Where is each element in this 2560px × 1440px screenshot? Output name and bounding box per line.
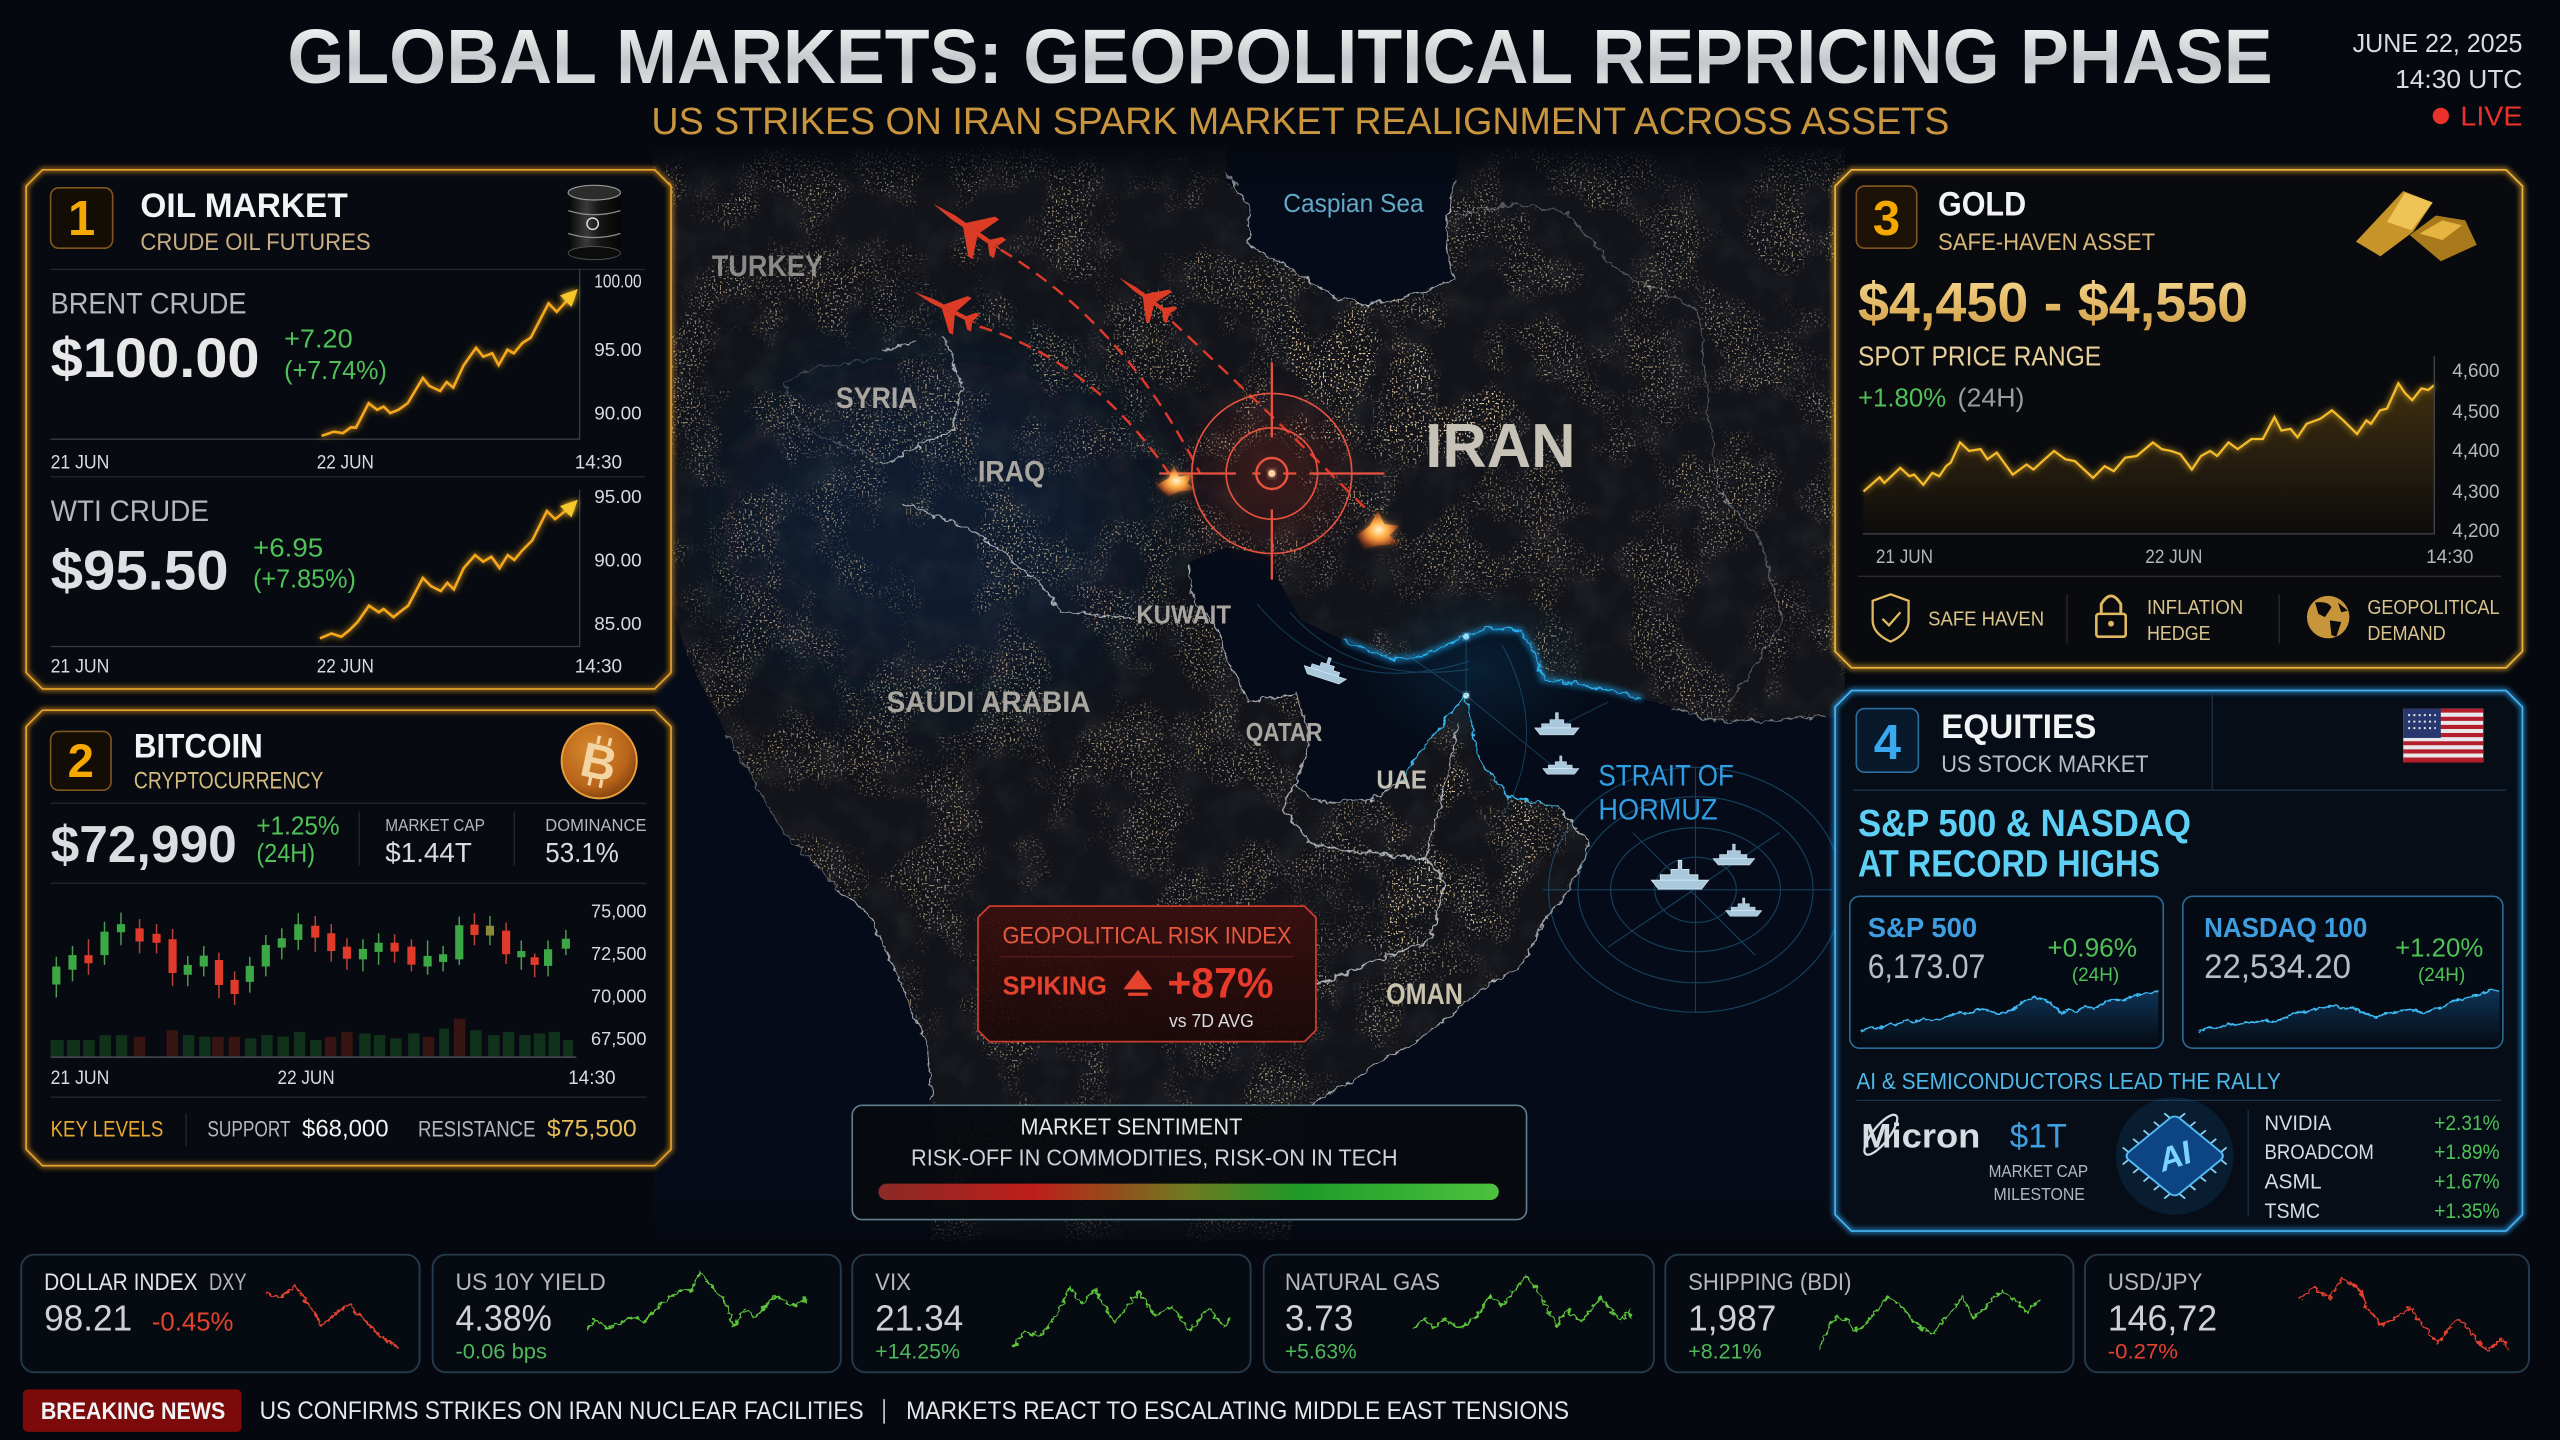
chart: bitcoin candlesticks: 22 JUN [278, 1067, 335, 1089]
map labels: IRAQ [978, 456, 1045, 489]
ticker: shipping BDI: SHIPPING (BDI) [1688, 1270, 1851, 1296]
bitcoin price stats: 53.1% [545, 837, 619, 868]
icon: AI chip: AI [2152, 1133, 2197, 1179]
Micron milestone: $1T [2010, 1118, 2067, 1156]
semiconductor leaders list: TSMC [2264, 1200, 2320, 1223]
inflation hedge tag: HEDGE [2147, 623, 2211, 645]
chart: bitcoin candlesticks: 21 JUN [51, 1067, 109, 1089]
map labels: Caspian Sea [1283, 188, 1424, 218]
callout: geopolitical risk index [978, 906, 1316, 1042]
Micron milestone [1859, 1110, 2088, 1204]
ticker: VIX: 21.34 [875, 1298, 963, 1339]
timestamp and live indicator [2353, 28, 2522, 132]
dividers [51, 269, 645, 477]
key levels row: $75,500 [547, 1115, 637, 1142]
ticker: US 10Y yield: -0.06 bps [456, 1340, 547, 1363]
key levels row [51, 1115, 637, 1142]
callout: geopolitical risk index: +87% [1167, 960, 1273, 1007]
map labels: OMAN [1386, 978, 1463, 1011]
Micron milestone: MARKET CAP [1989, 1161, 2088, 1181]
icon: bitcoin coin [562, 723, 637, 798]
map edge fades [653, 144, 1845, 1249]
heading: oil market: CRUDE OIL FUTURES [140, 229, 371, 256]
panel: equities [1835, 691, 2522, 1231]
breaking news bar: US CONFIRMS STRIKES ON IRAN NUCLEAR FACILITIES [260, 1397, 864, 1425]
badge 4: 4 [1874, 716, 1901, 770]
icon: AI chip [2112, 1097, 2237, 1215]
heading: bitcoin: CRYPTOCURRENCY [134, 768, 323, 795]
equities headline [1858, 802, 2191, 885]
map labels: UAE [1376, 765, 1427, 795]
ticker: USD/JPY: 146,72 [2108, 1298, 2217, 1339]
WTI crude block [51, 495, 356, 601]
timestamp and live indicator: LIVE [2460, 101, 2522, 132]
gold price range: $4,450 - $4,550 [1858, 272, 2248, 334]
sentiment bar [878, 1184, 1499, 1200]
gold price range: +1.80% [1858, 383, 1946, 413]
semiconductor leaders list: BROADCOM [2264, 1141, 2374, 1164]
ticker: USD/JPY: -0.27% [2108, 1340, 2178, 1363]
WTI crude block: WTI CRUDE [51, 495, 209, 528]
chart: Brent line: 100.00 [594, 270, 642, 291]
Brent crude block [51, 287, 387, 389]
WTI crude block: $95.50 [51, 539, 229, 601]
chart: Brent line: 22 JUN [317, 452, 374, 474]
map labels: SYRIA [836, 382, 918, 415]
heading: bitcoin [134, 728, 323, 795]
chart: Brent line: 90.00 [594, 403, 642, 424]
radar rings: Hormuz [1257, 604, 1608, 816]
ticker: dollar index: DXY [209, 1270, 247, 1296]
card: S&P 500: S&P 500 [1868, 912, 1977, 943]
chart: gold line: 22 JUN [2145, 546, 2202, 568]
card: Nasdaq 100: NASDAQ 100 [2204, 912, 2367, 943]
callout: geopolitical risk index: vs 7D AVG [1169, 1010, 1254, 1031]
key levels row: RESISTANCE [418, 1116, 536, 1141]
AI rally heading: AI & SEMICONDUCTORS LEAD THE RALLY [1856, 1068, 2281, 1094]
chart: bitcoin candlesticks [51, 901, 647, 1089]
badge 1: 1 [68, 192, 95, 246]
card: Nasdaq 100: +1.20% [2395, 933, 2483, 963]
chart: Brent line: 95.00 [594, 339, 642, 360]
map labels: STRAIT OF [1598, 759, 1734, 792]
volume bars [51, 1029, 573, 1056]
map: Middle East [653, 144, 1845, 1249]
timestamp and live indicator: JUNE 22, 2025 [2353, 28, 2522, 58]
heading: equities: US STOCK MARKET [1941, 751, 2149, 778]
badge 2: 2 [68, 735, 94, 788]
ticker: VIX: VIX [875, 1270, 911, 1296]
semiconductor leaders list: NVIDIA [2264, 1112, 2332, 1135]
chart: Brent line [51, 269, 642, 474]
callout: market sentiment: MARKET SENTIMENT [1020, 1114, 1242, 1140]
gold price range: SPOT PRICE RANGE [1858, 341, 2101, 372]
radar rings: fleet [1543, 767, 1842, 1012]
chart: bitcoin candlesticks: 67,500 [591, 1028, 647, 1049]
equities headline: S&P 500 & NASDAQ [1858, 802, 2191, 844]
chart: bitcoin candlesticks: 70,000 [591, 985, 647, 1006]
map labels: KUWAIT [1136, 600, 1231, 630]
explosions [1156, 465, 1401, 549]
heading: gold: GOLD [1938, 186, 2026, 224]
semiconductor leaders list: +2.31% [2434, 1112, 2500, 1135]
semiconductor leaders list: +1.67% [2434, 1171, 2500, 1194]
ticker: dollar index: -0.45% [152, 1307, 233, 1337]
chart: bitcoin candlesticks: 14:30 [568, 1067, 616, 1089]
Micron milestone: MILESTONE [1993, 1184, 2085, 1204]
dividers [1853, 694, 2506, 1216]
chart: WTI line: 22 JUN [317, 656, 374, 678]
bitcoin price stats: MARKET CAP [385, 815, 485, 835]
icon: oil barrel [568, 185, 620, 260]
card: S&P 500: (24H) [2072, 964, 2119, 986]
ticker: USD/JPY [2085, 1255, 2529, 1372]
WTI crude block: +6.95 [253, 533, 323, 563]
gold price range: (24H) [1958, 383, 2024, 413]
Brent crude block: (+7.74%) [284, 355, 387, 385]
chart: WTI line: 90.00 [594, 550, 642, 571]
geopolitical demand tag [2307, 596, 2500, 645]
ticker: US 10Y yield [433, 1255, 841, 1372]
card: S&P 500: 6,173.07 [1868, 948, 1985, 986]
callout: market sentiment: RISK-OFF IN COMMODITIES, RISK-ON IN TECH [911, 1145, 1398, 1171]
ticker: shipping BDI: 1,987 [1688, 1298, 1776, 1339]
badge 4 [1856, 709, 1918, 772]
ticker: dollar index: 98.21 [44, 1298, 132, 1339]
sea [653, 147, 1845, 1241]
badge 1 [51, 188, 113, 248]
card: S&P 500: +0.96% [2047, 933, 2137, 963]
safe haven tag [1873, 594, 2044, 642]
ticker: dollar index [21, 1255, 420, 1372]
ticker row [21, 1255, 2529, 1372]
icon: bitcoin coin: B [576, 733, 622, 793]
chart: gold line: 4,400 [2452, 440, 2500, 462]
card: Nasdaq 100 [2183, 896, 2503, 1048]
semiconductor leaders list: +1.89% [2434, 1141, 2500, 1164]
breaking news bar: BREAKING NEWS [41, 1398, 225, 1425]
ticker: US 10Y yield: 4.38% [456, 1298, 552, 1339]
ticker: dollar index: DOLLAR INDEX [44, 1270, 198, 1296]
bitcoin price stats: DOMINANCE [545, 815, 647, 835]
Brent crude block: $100.00 [51, 327, 260, 389]
dividers [1858, 576, 2501, 643]
equities headline: AT RECORD HIGHS [1858, 843, 2160, 885]
map labels: TURKEY [712, 250, 823, 283]
ticker: US 10Y yield: US 10Y YIELD [456, 1270, 606, 1296]
timestamp and live indicator: 14:30 UTC [2395, 64, 2522, 94]
chart: Brent line: 14:30 [575, 452, 622, 474]
ticker: natural gas: NATURAL GAS [1285, 1270, 1440, 1296]
aircraft [905, 184, 1184, 342]
heading: oil market [140, 187, 371, 256]
ticker: shipping BDI [1665, 1255, 2073, 1372]
bitcoin price stats: $72,990 [51, 816, 237, 874]
ticker: shipping BDI: +8.21% [1688, 1340, 1762, 1363]
strike routes [980, 250, 1370, 513]
callout: geopolitical risk index: SPIKING [1002, 970, 1107, 1000]
chart: gold line: 4,200 [2452, 520, 2500, 542]
icon: US flag [2403, 709, 2483, 762]
safe haven tag: SAFE HAVEN [1928, 608, 2044, 630]
card: Nasdaq 100: (24H) [2418, 964, 2465, 986]
chart: WTI line: 85.00 [594, 613, 642, 634]
subtitle: US STRIKES ON IRAN SPARK MARKET REALIGNMENT ACROSS ASSETS [651, 100, 1949, 142]
Brent crude block: +7.20 [284, 324, 353, 354]
key levels row: SUPPORT [207, 1116, 291, 1141]
key levels row: KEY LEVELS [51, 1116, 163, 1141]
ticker: natural gas: 3.73 [1285, 1298, 1353, 1339]
Micron milestone: Micron [1861, 1118, 1980, 1156]
ticker: natural gas: +5.63% [1285, 1340, 1357, 1363]
chart: Brent line: 21 JUN [51, 452, 109, 474]
chart: gold line: 14:30 [2426, 546, 2474, 568]
coastlines and borders [727, 171, 1825, 1104]
panel: gold [1835, 170, 2522, 668]
chart: gold line: 21 JUN [1876, 546, 1933, 568]
chart: bitcoin candlesticks: 72,500 [591, 943, 647, 964]
Brent crude block: BRENT CRUDE [51, 287, 247, 320]
map labels: IRAN [1425, 412, 1576, 481]
chart: gold line: 4,500 [2452, 401, 2500, 423]
ticker: VIX: +14.25% [875, 1340, 960, 1363]
geopolitical demand tag: DEMAND [2367, 623, 2446, 645]
Hormuz blue glow [1344, 588, 1642, 807]
heading: equities: EQUITIES [1941, 708, 2096, 746]
card: Nasdaq 100: 22,534.20 [2204, 948, 2351, 986]
panel: oil market [26, 170, 671, 689]
map labels: HORMUZ [1598, 794, 1718, 827]
map labels: SAUDI ARABIA [887, 686, 1091, 719]
chart: gold line: 4,300 [2452, 481, 2500, 503]
ticker: VIX [852, 1255, 1251, 1372]
ticker: USD/JPY: USD/JPY [2108, 1270, 2203, 1296]
panel: bitcoin [26, 710, 671, 1166]
heading: gold: SAFE-HAVEN ASSET [1938, 229, 2155, 256]
bitcoin price stats [51, 810, 647, 874]
heading: oil market: OIL MARKET [140, 187, 348, 225]
dividers [51, 803, 647, 1146]
bitcoin price stats: $1.44T [385, 837, 472, 868]
title: GLOBAL MARKETS: GEOPOLITICAL REPRICING PHASE [287, 15, 2273, 100]
WTI crude block: (+7.85%) [253, 564, 356, 594]
heading: equities [1941, 708, 2149, 778]
callout: geopolitical risk index: GEOPOLITICAL RISK INDEX [1002, 924, 1292, 950]
chart: WTI line: 14:30 [575, 656, 622, 678]
bitcoin price stats: (24H) [256, 838, 315, 868]
chart: gold line: 4,600 [2452, 360, 2500, 382]
geopolitical demand tag: GEOPOLITICAL [2367, 597, 2500, 619]
chart: gold line [1863, 356, 2500, 568]
badge 3: 3 [1873, 192, 1900, 246]
bitcoin price stats: +1.25% [256, 810, 340, 840]
card: S&P 500 [1850, 896, 2163, 1048]
key levels row: $68,000 [302, 1115, 389, 1142]
semiconductor leaders list: +1.35% [2434, 1200, 2500, 1223]
chart: WTI line [51, 486, 642, 678]
semiconductor leaders list: ASML [2264, 1171, 2322, 1194]
heading: bitcoin: BITCOIN [134, 728, 263, 766]
badge 3 [1856, 186, 1917, 248]
chart: bitcoin candlesticks: 75,000 [591, 901, 647, 922]
gold price range [1858, 272, 2248, 413]
semiconductor leaders list [2264, 1112, 2500, 1223]
land mass [653, 147, 1845, 1241]
inflation hedge tag [2096, 596, 2243, 645]
heading: gold [1938, 186, 2155, 256]
target reticle [1159, 362, 1384, 580]
inflation hedge tag: INFLATION [2147, 597, 2243, 619]
icon: gold bars [2356, 191, 2477, 261]
badge 2 [51, 731, 111, 790]
breaking news bar: MARKETS REACT TO ESCALATING MIDDLE EAST TENSIONS [906, 1397, 1569, 1425]
map labels: QATAR [1246, 717, 1323, 747]
ships [1302, 651, 1762, 916]
breaking news bar [23, 1389, 1569, 1432]
chart: WTI line: 21 JUN [51, 656, 109, 678]
chart: WTI line: 95.00 [594, 486, 642, 507]
map labels [712, 188, 1734, 1011]
ticker: natural gas [1264, 1255, 1654, 1372]
callout: market sentiment [852, 1105, 1527, 1220]
